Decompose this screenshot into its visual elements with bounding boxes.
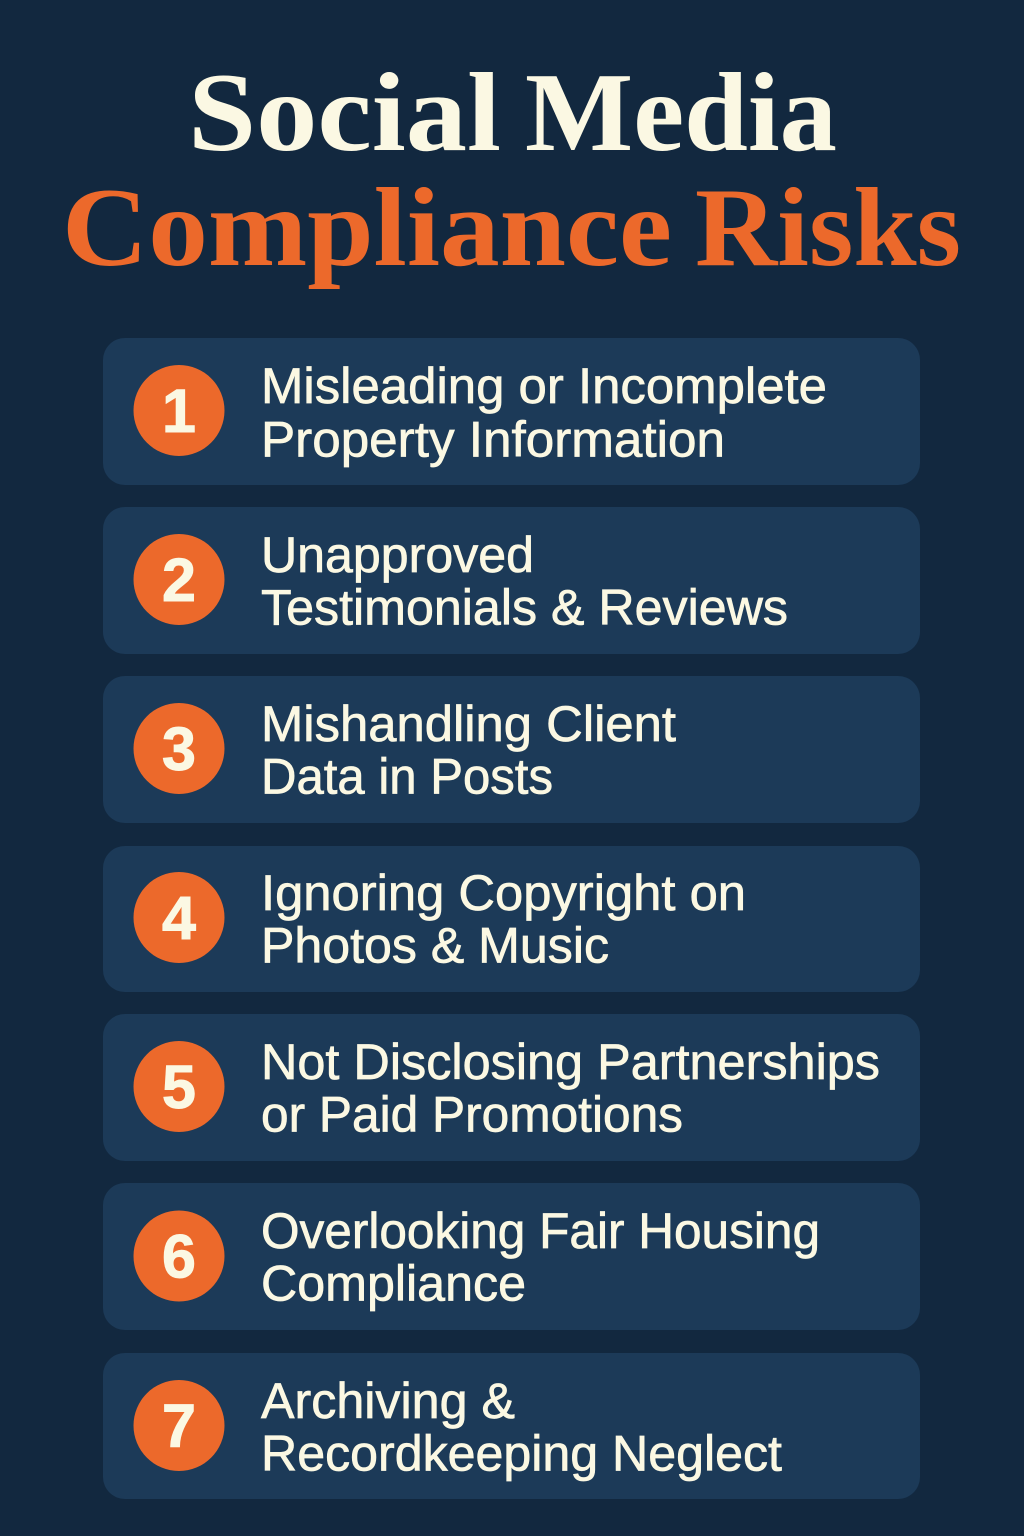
icon: number 4: 4: [162, 884, 196, 952]
panel: risk 4: [103, 846, 920, 992]
text: risk 2: Testimonials & Reviews: [261, 580, 788, 636]
text: risk 1: Property Information: [261, 412, 725, 468]
icon: number 2: [134, 534, 224, 625]
panel: risk 6: [103, 1183, 920, 1330]
text: risk 5: or Paid Promotions: [261, 1086, 683, 1142]
icon: number 4: [134, 872, 224, 963]
text: risk 2: [261, 527, 788, 636]
text: risk 3: Data in Posts: [261, 748, 553, 804]
icon: number 6: 6: [162, 1222, 196, 1290]
text: risk 4: [261, 865, 746, 974]
text: risk 4: Photos & Music: [261, 918, 609, 974]
text: risk 2: Unapproved: [261, 527, 534, 583]
panel: risk 5: [103, 1014, 920, 1161]
panel: risk 7: [103, 1353, 920, 1499]
text: risk 6: Overlooking Fair Housing: [261, 1203, 820, 1259]
text: risk 4: Ignoring Copyright on: [261, 865, 746, 921]
icon: number 6: [134, 1210, 224, 1302]
panel: risk 3: [103, 676, 920, 823]
text: risk 6: Compliance: [261, 1256, 526, 1312]
title: [62, 51, 961, 290]
text: risk 5: [261, 1034, 880, 1142]
title: Risks: [695, 166, 961, 290]
panel: risk 2: [103, 507, 920, 654]
icon: number 7: 7: [162, 1392, 196, 1460]
title: Social: [188, 51, 501, 175]
text: risk 1: Misleading or Incomplete: [261, 358, 827, 414]
icon: number 1: 1: [162, 377, 196, 445]
text: risk 6: [261, 1203, 820, 1312]
text: risk 1: [261, 358, 827, 468]
text: risk 7: [261, 1373, 782, 1482]
text: risk 5: Not Disclosing Partnerships: [261, 1034, 880, 1090]
icon: number 3: [134, 703, 224, 794]
icon: number 2: 2: [162, 546, 196, 614]
text: risk 7: Archiving &: [261, 1373, 515, 1429]
title: Media: [525, 51, 837, 175]
panel: risk 1: [103, 338, 920, 485]
icon: number 1: [134, 365, 224, 456]
icon: number 7: [134, 1380, 224, 1471]
icon: number 5: [134, 1041, 224, 1132]
text: risk 7: Recordkeeping Neglect: [261, 1426, 782, 1482]
text: risk 3: Mishandling Client: [261, 696, 676, 752]
icon: number 5: 5: [162, 1053, 196, 1121]
text: risk 3: [261, 696, 676, 804]
title: Compliance: [62, 166, 672, 290]
icon: number 3: 3: [162, 715, 196, 783]
